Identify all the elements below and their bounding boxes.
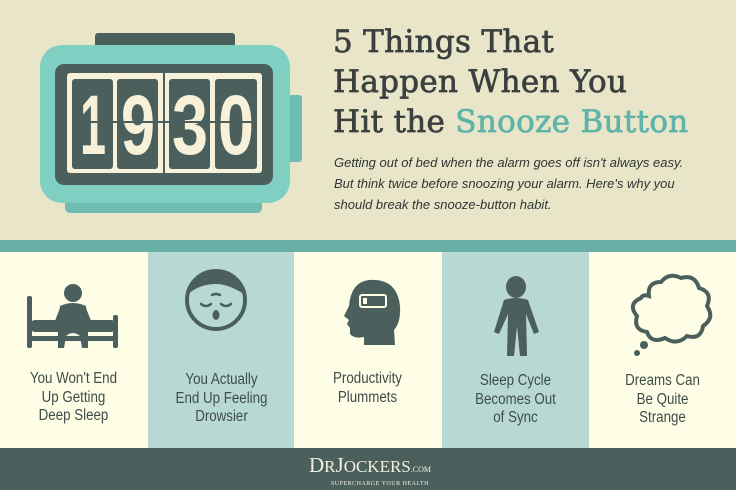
labels: of Sync — [493, 409, 538, 426]
clock illustration — [40, 33, 302, 213]
title: 5 Things That — [333, 24, 554, 60]
icon: head with low battery — [344, 280, 400, 345]
clock illustration: 9 — [121, 78, 155, 172]
clock illustration: 1 — [80, 78, 106, 172]
clock illustration: 3 — [172, 78, 208, 172]
labels: Deep Sleep — [39, 407, 108, 424]
logo: DRJOCKERS.COM — [309, 453, 431, 477]
labels: Sleep Cycle — [480, 372, 551, 389]
footer — [0, 448, 736, 490]
labels: Strange — [639, 409, 686, 426]
clock illustration: 0 — [218, 78, 254, 172]
icon: thought cloud — [630, 274, 712, 356]
labels: Productivity — [333, 370, 402, 387]
intro paragraph: Getting out of bed when the alarm goes off isn't always easy. But think twice before snoozing your alarm. Here's why you should break the snooze-button habit. — [334, 155, 683, 212]
labels: You Actually — [185, 371, 258, 388]
title: Hit the Snooze Button — [333, 104, 689, 140]
logo: SUPERCHARGE YOUR HEALTH — [331, 481, 429, 487]
labels: You Won't End — [30, 370, 117, 387]
labels: End Up Feeling — [176, 390, 267, 406]
labels: Up Getting — [42, 388, 105, 406]
labels: Be Quite — [637, 390, 688, 408]
icon: standing person — [494, 276, 539, 356]
columns backgrounds — [0, 252, 736, 448]
icon: drowsy face — [185, 269, 247, 331]
title: Happen When You — [333, 64, 627, 100]
labels: Dreams Can — [625, 372, 700, 389]
labels: Drowsier — [195, 408, 248, 425]
icon: person sitting on bed — [27, 284, 118, 348]
labels: Becomes Out — [475, 390, 556, 408]
labels: Plummets — [338, 388, 397, 406]
teal band — [0, 240, 736, 252]
title — [333, 24, 689, 140]
